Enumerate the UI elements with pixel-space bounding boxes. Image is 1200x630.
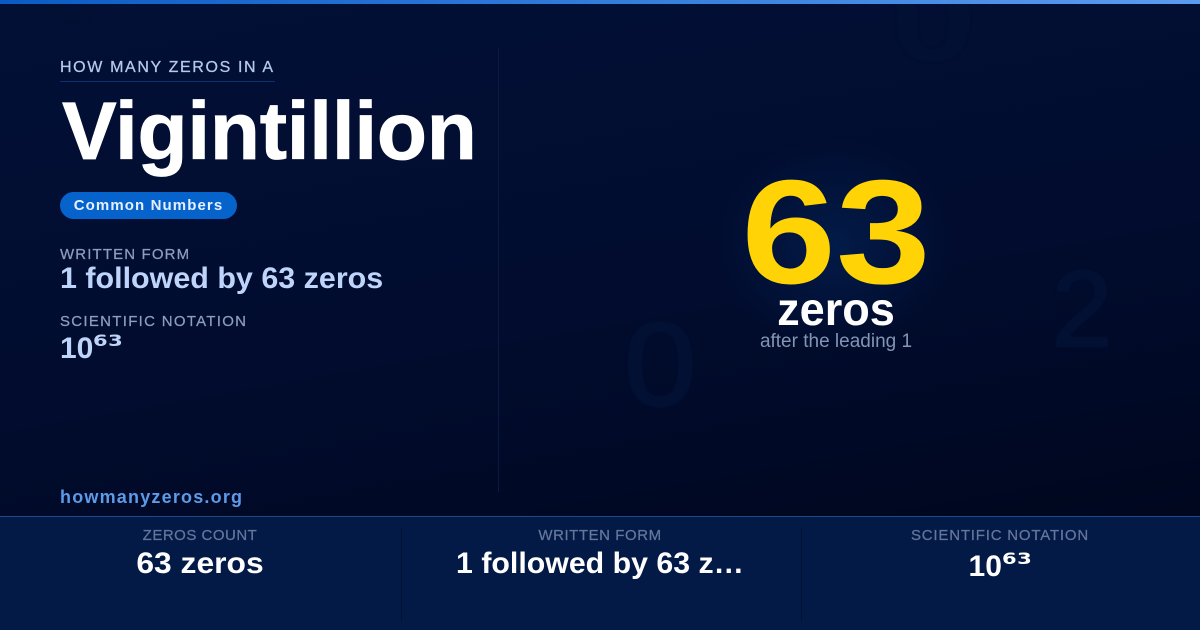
written form value: 1 followed by 63 zeros xyxy=(60,262,383,295)
scientific notation value: 10 xyxy=(60,332,93,365)
big number: 63 xyxy=(741,150,931,315)
stat value: 10 xyxy=(969,550,1002,583)
subtitle: after the leading 1 xyxy=(760,331,912,352)
stat: written form xyxy=(456,527,744,580)
scientific notation value: ⁶³ xyxy=(93,328,123,362)
ghost digit: zero lower centre: 0 xyxy=(624,299,696,431)
scientific notation label: SCIENTIFIC NOTATION xyxy=(60,313,247,330)
glow behind number xyxy=(715,140,955,350)
zeros word: zeros xyxy=(777,283,895,335)
panel: left details xyxy=(60,59,477,507)
stat label: SCIENTIFIC NOTATION xyxy=(911,527,1089,544)
title: Vigintillion xyxy=(62,86,477,177)
site url: howmanyzeros.org xyxy=(60,487,243,507)
footer stats strip xyxy=(0,516,1200,630)
stat value: 1 followed by 63 z… xyxy=(456,547,744,580)
stat value: ⁶³ xyxy=(1002,546,1032,580)
panel: hero number xyxy=(741,150,931,352)
ghost digit: two right: 2 xyxy=(1052,248,1112,369)
panel divider xyxy=(498,48,499,492)
stat label: WRITTEN FORM xyxy=(538,527,662,544)
stat label: ZEROS COUNT xyxy=(143,527,257,544)
stat divider xyxy=(801,527,802,621)
stat: zeros count xyxy=(136,527,264,580)
category badge xyxy=(60,192,237,219)
top accent bar xyxy=(0,0,1200,4)
stat value xyxy=(969,546,1032,583)
eyebrow heading: HOW MANY ZEROS IN A xyxy=(60,59,275,76)
scientific notation value xyxy=(60,328,123,365)
category badge: Common Numbers xyxy=(74,197,223,214)
written form label: WRITTEN FORM xyxy=(60,246,190,263)
stat divider xyxy=(401,527,402,621)
stat value: 63 zeros xyxy=(136,547,264,580)
stat: scientific notation xyxy=(911,527,1089,583)
